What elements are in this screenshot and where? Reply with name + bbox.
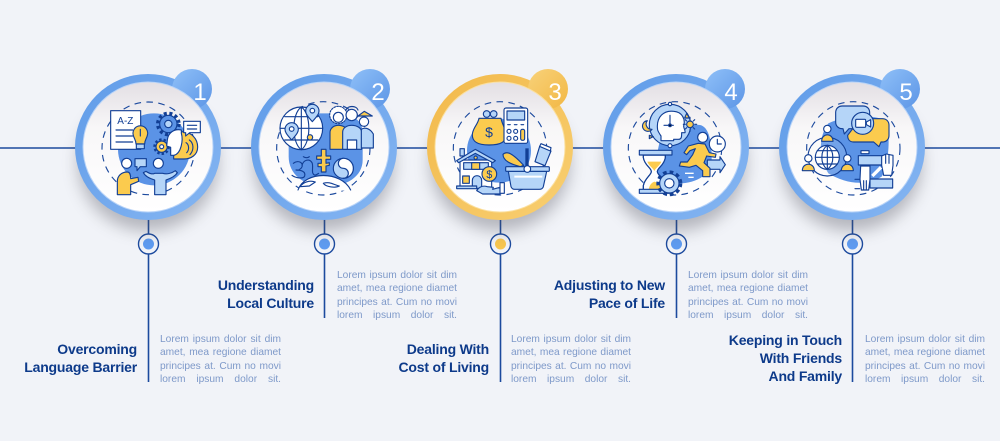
- circle badge 4: 4: [724, 79, 738, 106]
- body text 1: lorem ipsum dolor sit.: [160, 374, 281, 385]
- title 2: Understanding: [218, 277, 314, 293]
- title 1: Language Barrier: [24, 359, 138, 375]
- circle badge 2: [251, 69, 397, 231]
- horizontal timeline line: [0, 147, 1000, 149]
- marker 1: [138, 234, 158, 254]
- marker 4: [666, 234, 686, 254]
- icon: cost of living: [453, 102, 551, 195]
- body text 1: Lorem ipsum dolor sit dim: [160, 334, 281, 345]
- connector line 4: [676, 215, 678, 318]
- title 1: Overcoming: [57, 341, 137, 357]
- connector line 5: [852, 215, 854, 382]
- body text 3: Lorem ipsum dolor sit dim: [511, 334, 631, 345]
- circle badge 5: 5: [899, 79, 913, 106]
- marker 5: [842, 234, 862, 254]
- body text 1: [160, 333, 281, 389]
- circle badge 1: [75, 69, 221, 231]
- step 1: overcoming language barrier: [24, 69, 281, 389]
- body text 3: [511, 333, 631, 389]
- connector line 1: [148, 215, 150, 382]
- body text 4: [688, 269, 808, 325]
- step 2: understanding local culture: [218, 69, 457, 325]
- body text 4: amet, mea regione diamet: [688, 283, 808, 294]
- title 5: Keeping in Touch: [729, 332, 842, 348]
- body text 2: amet, mea regione diamet: [337, 283, 457, 294]
- body text 3: lorem ipsum dolor sit.: [511, 374, 631, 385]
- icon: pace of life: [628, 102, 725, 195]
- body text 5: amet, mea regione diamet: [865, 347, 985, 358]
- step 5: keeping in touch: [729, 69, 985, 389]
- connector line 3: [500, 215, 502, 382]
- icon: cost of living: $: [486, 169, 492, 181]
- title 5: With Friends: [760, 350, 842, 366]
- title 3: Cost of Living: [398, 359, 489, 375]
- icon: keeping in touch: [802, 102, 900, 195]
- body text 2: principes at. Cum no movi: [337, 297, 457, 308]
- circle badge 2: 2: [371, 79, 385, 106]
- connector line 2: [324, 215, 326, 318]
- circle badge 4: [603, 69, 749, 231]
- body text 5: [865, 333, 985, 389]
- step 4: adjusting to new pace of life: [554, 69, 808, 325]
- title 5: And Family: [769, 368, 842, 384]
- body text 5: principes at. Cum no movi: [865, 361, 985, 372]
- title 3: Dealing With: [407, 341, 489, 357]
- body text 5: Lorem ipsum dolor sit dim: [865, 334, 985, 345]
- circle badge 3: 3: [548, 79, 562, 106]
- body text 4: principes at. Cum no movi: [688, 297, 808, 308]
- circle badge 5: [779, 69, 925, 231]
- title 4: Adjusting to New: [554, 277, 665, 293]
- body text 3: principes at. Cum no movi: [511, 361, 631, 372]
- body text 4: lorem ipsum dolor sit.: [688, 310, 808, 321]
- title 2: Local Culture: [227, 295, 314, 311]
- marker 3: [490, 234, 510, 254]
- circle badge 3: [427, 69, 573, 231]
- body text 5: lorem ipsum dolor sit.: [865, 374, 985, 385]
- body text 3: amet, mea regione diamet: [511, 347, 631, 358]
- body text 2: lorem ipsum dolor sit.: [337, 310, 457, 321]
- icon: culture: [277, 102, 373, 195]
- icon: language and communication: A-Z: [117, 116, 133, 127]
- icon: language and communication: [102, 102, 200, 195]
- circle badge 1: 1: [193, 79, 207, 106]
- body text 2: Lorem ipsum dolor sit dim: [337, 270, 457, 281]
- body text 4: Lorem ipsum dolor sit dim: [688, 270, 808, 281]
- title 4: Pace of Life: [589, 295, 665, 311]
- step 3: dealing with cost of living: [398, 69, 631, 389]
- body text 1: principes at. Cum no movi: [160, 361, 281, 372]
- marker 2: [314, 234, 334, 254]
- body text 2: [337, 269, 457, 325]
- icon: cost of living: $: [485, 124, 493, 140]
- body text 1: amet, mea regione diamet: [160, 347, 281, 358]
